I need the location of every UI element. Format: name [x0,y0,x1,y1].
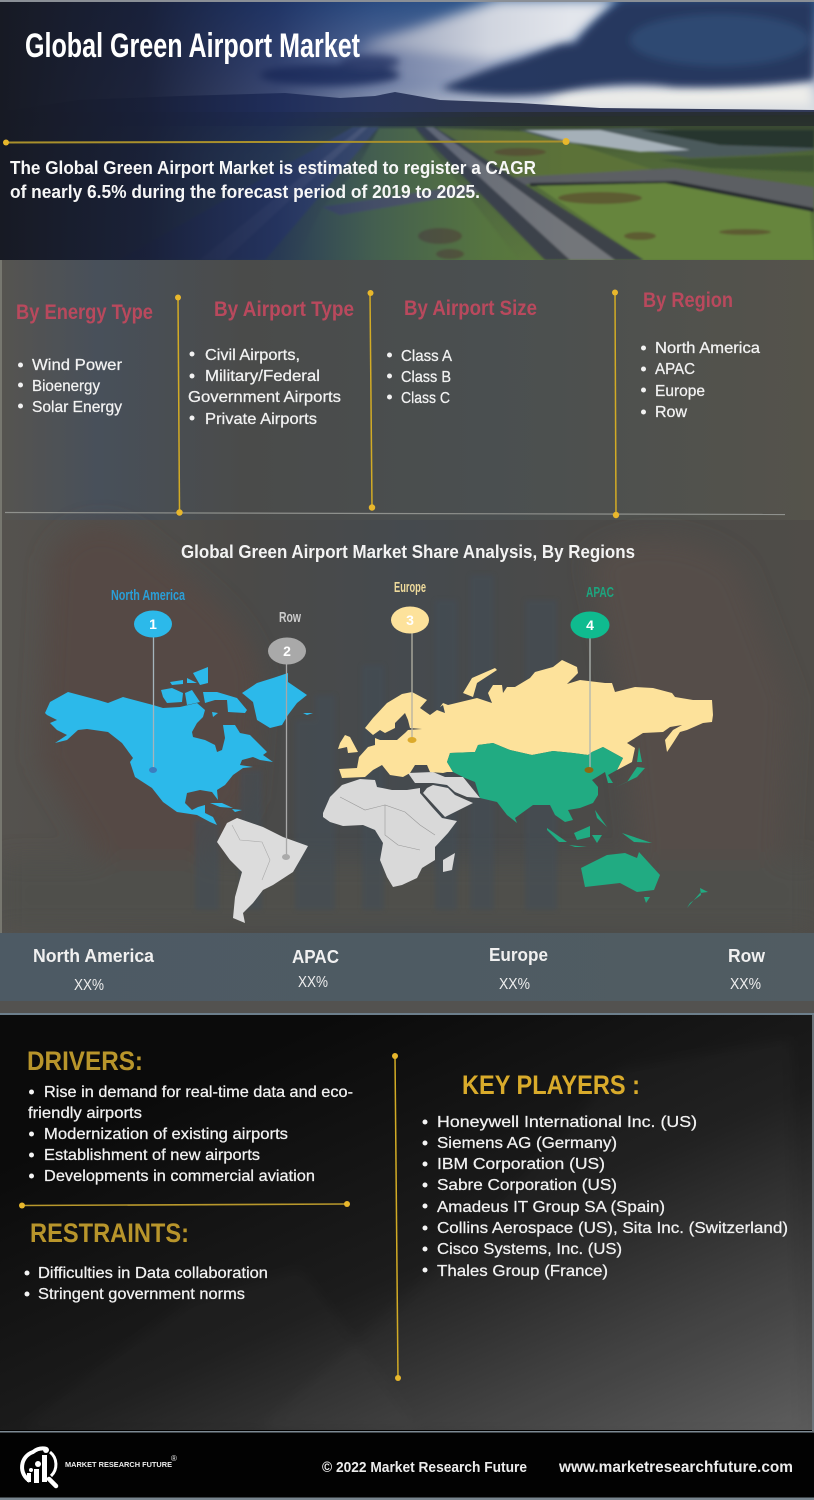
list: key players: Honeywell International Inc. (US) [437,1114,697,1131]
footer [0,1015,814,1500]
list: airport sizes: Class C [401,390,450,407]
stat: Europe: Europe [489,945,548,965]
stat: Row [728,946,766,993]
heading: By Energy Type: By Energy Type [16,301,153,324]
list: regions: APAC [655,361,695,378]
list: drivers [28,1084,353,1185]
map: Asia Pacific [447,743,708,908]
heading: By Airport Size: By Airport Size [404,297,537,320]
website: www.marketresearchfuture.com [558,1459,793,1476]
list: regions [641,340,760,421]
pin: Europe: 3 [406,612,414,628]
list: airport sizes: Class A [401,348,452,365]
list: airport types: Private Airports [205,411,317,428]
map: North America [45,667,313,825]
stat: North America: North America [33,946,155,966]
gold rule [3,138,570,146]
heading: market share analysis: Global Green Airport Market Share Analysis, By Regions [181,542,635,562]
list: key players: Sabre Corporation (US) [437,1177,617,1194]
pin: APAC: 4 [586,617,594,633]
stat: Europe [489,945,548,993]
hero photo [0,0,814,260]
list: airport types: Civil Airports, [205,347,300,364]
list: key players: Siemens AG (Germany) [437,1135,617,1152]
pin: APAC: APAC [586,584,614,601]
list: key players: Thales Group (France) [437,1263,608,1280]
stat: APAC: XX% [298,974,328,991]
right runway [415,127,644,260]
list: airport types: Military/Federal [205,368,320,385]
gold rule [19,1201,350,1208]
pin: Row [268,609,306,860]
list: energy types: Wind Power [32,357,123,374]
dividers: gold column rules [5,290,785,518]
list: drivers: Modernization of existing airports [44,1126,288,1143]
heading: By Region: By Region [643,289,733,312]
summary text: of nearly 6.5% during the forecast period of 2019 to 2025. [10,182,480,202]
heading: By Airport Type: By Airport Type [214,298,354,321]
heading: key players: KEY PLAYERS : [462,1070,640,1100]
pin: Europe: Europe [394,579,426,596]
stat: North America [33,946,155,994]
centre grass [348,127,488,228]
heading: restraints: RESTRAINTS: [30,1218,189,1248]
panel: segmentation and map background [0,260,814,933]
far right grass [535,183,814,260]
pin: North America: North America [111,587,185,604]
title: Global Green Airport Market [25,27,360,65]
registered mark: ® [171,1454,177,1463]
map: Africa and Middle East [323,772,480,887]
stat: Europe: XX% [499,976,530,993]
hero panel: airport runway photo [0,0,814,260]
list: key players: Amadeus IT Group SA (Spain) [437,1199,665,1216]
icon: logo [22,1447,56,1486]
list: airport sizes: Class B [401,369,451,386]
list: airport types [188,347,341,428]
list: drivers: Establishment of new airports [44,1147,260,1164]
gold column rule [392,1053,401,1381]
list: energy types: Bioenergy [32,378,100,395]
list: key players: IBM Corporation (US) [437,1156,605,1173]
summary text: The Global Green Airport Market is estimated to register a CAGR [10,158,536,178]
list: energy types [18,357,123,416]
list: restraints: Stringent government norms [38,1286,245,1303]
map: South America [217,818,308,923]
list: drivers: friendly airports [28,1105,142,1122]
world map [45,660,713,923]
list: restraints [24,1265,268,1303]
copyright: © 2022 Market Research Future [322,1459,527,1476]
logo wordmark: MARKET RESEARCH FUTURE [65,1460,172,1469]
pin: North America: 1 [149,616,157,632]
pin: Row: 2 [283,643,291,659]
list: drivers: Developments in commercial aviation [44,1168,315,1185]
airport buildings [519,128,814,158]
panel: regional share strip [0,933,814,1015]
pin: North America [111,587,185,773]
stat: APAC [292,947,339,991]
heading: drivers: DRIVERS: [27,1046,143,1076]
stat: APAC: APAC [292,947,339,967]
stat: North America: XX% [74,977,104,994]
list: key players [422,1114,788,1280]
pin: Row: Row [279,609,301,626]
stat: Row: Row [728,946,766,966]
list: airport types: Government Airports [188,389,341,406]
panel: drivers, restraints and key players background [0,1015,814,1430]
list: energy types: Solar Energy [32,399,122,416]
list: key players: Cisco Systems, Inc. (US) [437,1241,622,1258]
list: drivers: Rise in demand for real-time data and eco- [44,1084,353,1101]
pin: APAC [570,584,614,773]
summary text [10,158,536,202]
map: Europe and Russia [338,660,713,778]
middle right field [438,128,646,176]
list: regions: Europe [655,383,705,400]
list: regions: Row [655,404,687,421]
left runway [240,126,379,258]
list: key players: Collins Aerospace (US), Sita Inc. (Switzerland) [437,1220,788,1237]
list: restraints: Difficulties in Data collaboration [38,1265,268,1282]
list: airport sizes [387,348,452,407]
taxiway [322,168,814,215]
list: regions: North America [655,340,760,357]
pin: Europe [391,579,429,743]
stat: Row: XX% [730,976,761,993]
